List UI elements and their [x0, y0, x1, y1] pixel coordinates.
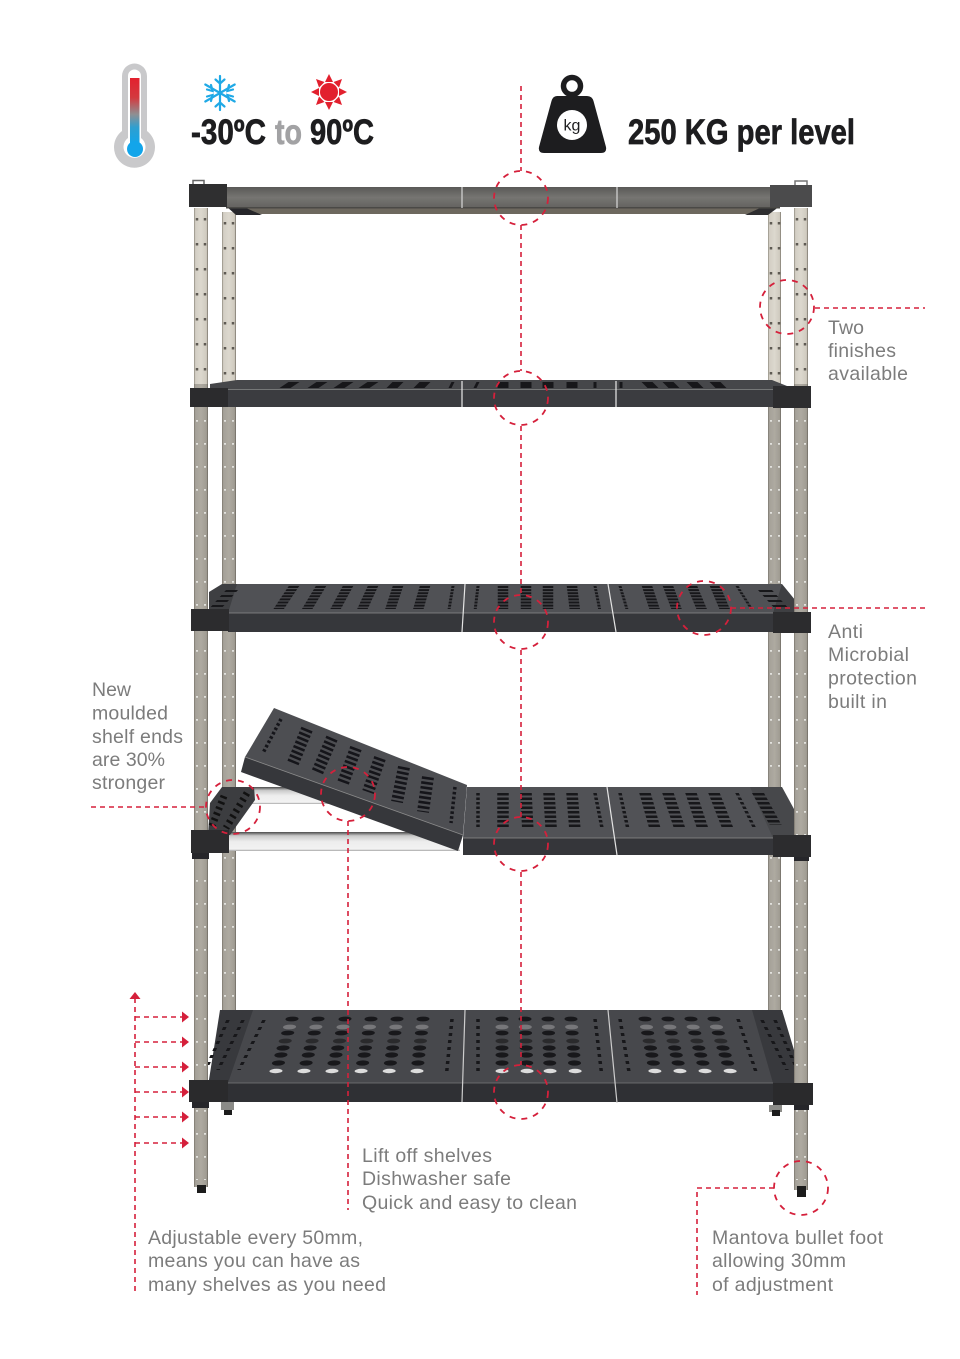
text: two finishes: available [828, 363, 908, 385]
text: adjustable: means you can have as [148, 1250, 360, 1272]
moulded shelf end blocks [189, 180, 813, 1105]
text: bullet foot: of adjustment [712, 1274, 834, 1296]
text: two finishes: finishes [828, 340, 896, 362]
text: moulded shelf ends [92, 679, 183, 794]
text: adjustable: Adjustable every 50mm, [148, 1227, 363, 1249]
third shelf [209, 584, 800, 632]
text: lift off shelves: Dishwasher safe [362, 1168, 511, 1190]
second shelf [210, 380, 792, 407]
text: bullet foot [712, 1227, 884, 1296]
text: moulded shelf ends: stronger [92, 772, 166, 794]
heading: temperature range: -30ºC [191, 113, 266, 152]
text: anti microbial: Anti [828, 621, 863, 643]
text: two finishes: Two [828, 317, 864, 339]
text: anti microbial [828, 621, 917, 713]
text: anti microbial: built in [828, 691, 887, 713]
front posts [192, 208, 809, 1197]
rear posts [222, 212, 781, 1012]
text: bullet foot: allowing 30mm [712, 1250, 846, 1272]
callout markers and leader lines [91, 86, 925, 1295]
text: moulded shelf ends: shelf ends [92, 726, 183, 748]
icon: weight: kg [564, 118, 580, 134]
text: bullet foot: Mantova bullet foot [712, 1227, 884, 1249]
left end tray of fourth shelf [208, 787, 255, 835]
text: moulded shelf ends: are 30% [92, 749, 165, 771]
text: lift off shelves [362, 1145, 577, 1214]
heading: temperature range: 90ºC [310, 113, 374, 152]
text: adjustable [148, 1227, 386, 1296]
lifted shelf panel [241, 708, 467, 851]
heading: temperature range: to [275, 113, 302, 152]
icon: weight [539, 78, 606, 153]
text: two finishes [828, 317, 908, 385]
icon: sun [311, 74, 347, 110]
heading: temperature range [191, 113, 374, 152]
text: anti microbial: Microbial [828, 644, 909, 666]
heading: load rating: 250 KG per level [628, 113, 855, 152]
shelving unit [189, 180, 813, 1197]
fourth shelf rails [228, 787, 460, 851]
fourth shelf [463, 787, 800, 855]
icon: thermometer [114, 64, 155, 168]
icon: snowflake [205, 76, 235, 110]
text: lift off shelves: Quick and easy to clean [362, 1192, 577, 1214]
adjustment arrows [130, 992, 189, 1292]
text: moulded shelf ends: New [92, 679, 132, 701]
bottom shelf [206, 1010, 800, 1103]
text: lift off shelves: Lift off shelves [362, 1145, 492, 1167]
top shelf [226, 187, 780, 215]
text: moulded shelf ends: moulded [92, 702, 168, 724]
text: anti microbial: protection [828, 668, 917, 690]
text: adjustable: many shelves as you need [148, 1274, 386, 1296]
